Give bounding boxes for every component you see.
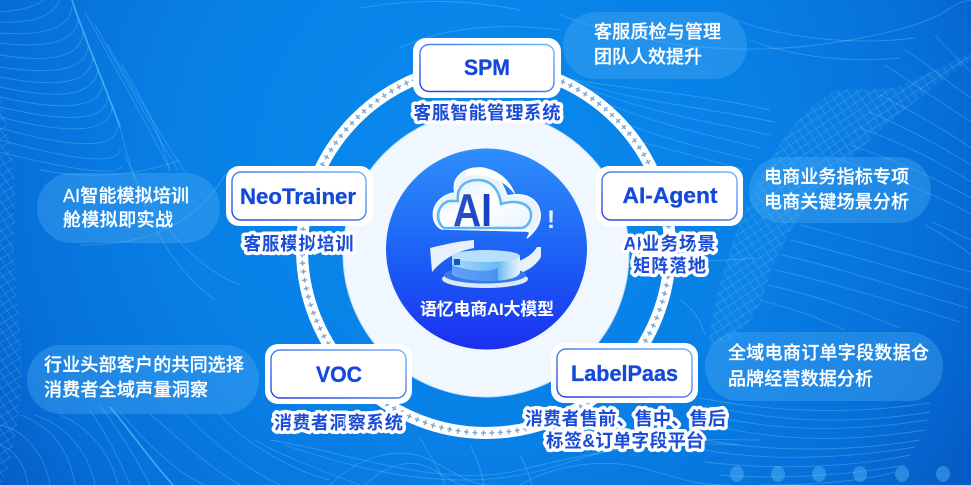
callout: voice of customer <box>27 345 259 414</box>
bottom-centre waves <box>270 440 740 476</box>
right mesh ribbon <box>708 52 971 346</box>
label: LabelPaas subtitle <box>525 408 726 451</box>
bottom-right wave fan <box>700 398 930 410</box>
label: LabelPaas subtitle: 消费者售前、售中、售后 <box>525 408 726 429</box>
card: NeoTrainer <box>226 166 373 226</box>
bottom-right dots <box>730 466 744 482</box>
icon: AI cloud: AI <box>453 184 492 236</box>
label: AI-Agent subtitle <box>624 233 716 276</box>
callout: voice of customer: 行业头部客户的共同选择 <box>44 355 244 375</box>
callout: order data warehouse: 全域电商订单字段数据仓 <box>728 342 929 363</box>
card: AI-Agent: AI-Agent <box>622 183 718 208</box>
left mesh strip <box>0 95 22 485</box>
callout: quality management: 团队人效提升 <box>594 47 702 67</box>
label: SPM subtitle: 客服智能管理系统 <box>414 102 560 123</box>
callout: voice of customer: 消费者全域声量洞察 <box>44 379 208 400</box>
label: AI-Agent subtitle: AI业务场景 <box>624 233 716 254</box>
bottom-left wave fan <box>110 407 173 485</box>
icon: AI cloud <box>433 168 555 238</box>
card: NeoTrainer: NeoTrainer <box>240 184 356 209</box>
callout: AI training: AI智能模拟培训 <box>63 186 189 206</box>
callout: ecommerce metrics <box>749 157 931 223</box>
card: SPM <box>413 38 561 98</box>
top-left wave fan <box>72 0 120 127</box>
card: VOC <box>265 344 412 404</box>
icon: AI cloud: ! <box>547 206 555 234</box>
card: SPM: SPM <box>464 55 510 80</box>
inner light disc <box>343 111 629 397</box>
card: LabelPaas: LabelPaas <box>571 361 678 386</box>
icon: platform <box>430 240 541 288</box>
top-centre waves <box>360 1 520 10</box>
callout: ecommerce metrics: 电商业务指标专项 <box>764 167 909 187</box>
label: VOC subtitle: 消费者洞察系统 <box>274 412 403 433</box>
callout: ecommerce metrics: 电商关键场景分析 <box>764 192 909 212</box>
right wave fan <box>880 95 971 148</box>
label: NeoTrainer subtitle: 客服模拟培训 <box>244 233 354 254</box>
center title: 语忆电商AI大模型 <box>420 300 554 319</box>
label: LabelPaas subtitle: 标签&订单字段平台 <box>546 430 704 451</box>
callout: order data warehouse: 品牌经营数据分析 <box>728 369 873 389</box>
callout: AI training: 舱模拟即实战 <box>63 210 173 230</box>
card: AI-Agent <box>596 166 743 226</box>
card: VOC: VOC <box>316 362 362 387</box>
callout: AI training <box>37 173 220 243</box>
core circle <box>386 148 587 350</box>
callout: quality management <box>563 12 747 79</box>
card: LabelPaas <box>551 343 698 403</box>
label: AI-Agent subtitle: 矩阵落地 <box>633 255 706 276</box>
callout: order data warehouse <box>705 332 943 401</box>
callout: quality management: 客服质检与管理 <box>594 21 721 42</box>
dotted ring <box>302 65 670 433</box>
